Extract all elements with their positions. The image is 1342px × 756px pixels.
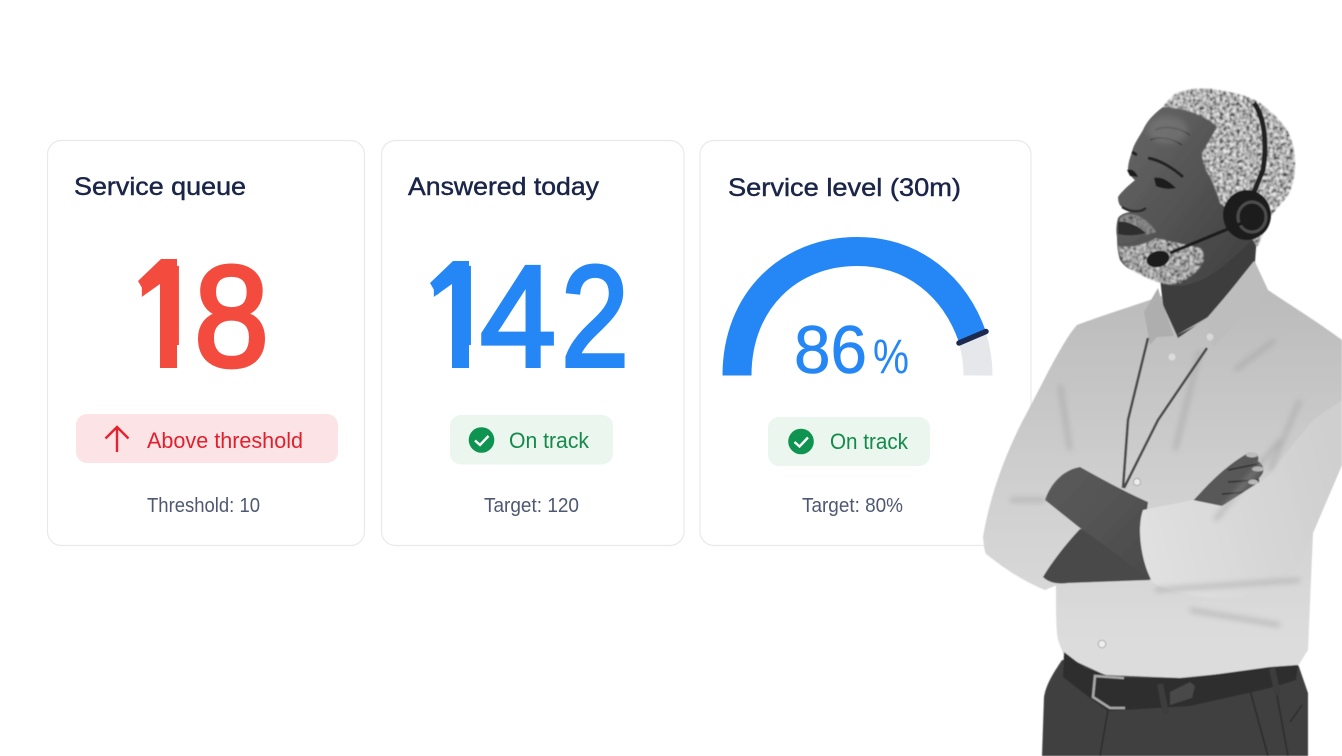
person: support agent with headset [983, 88, 1342, 756]
lower forearm [1043, 529, 1150, 583]
trousers [1042, 660, 1308, 756]
metric: 142 answered: 1 [421, 236, 501, 397]
panel: answered today [382, 140, 684, 546]
beard [1118, 214, 1204, 285]
collar [1144, 261, 1267, 360]
right sleeve cuff [1140, 400, 1342, 598]
status pill: above threshold [76, 414, 338, 463]
threshold note: Threshold: 10 [147, 495, 260, 517]
icon: check circle [788, 429, 814, 454]
status pill: above threshold: Above threshold [147, 428, 303, 453]
gauge value [794, 312, 909, 388]
heading: service queue: Service queue [74, 173, 246, 201]
heading: answered today: Answered today [408, 173, 600, 201]
metric: 142 answered: 2 [561, 236, 629, 397]
metric: 142 answered [412, 236, 629, 397]
gauge value: % [873, 331, 909, 384]
shirt torso [1046, 262, 1342, 678]
panel: service level [700, 140, 1031, 546]
face [1116, 100, 1262, 286]
target note: Target: 80% [802, 495, 903, 517]
icon: check circle [469, 427, 494, 453]
shirt folds [1010, 340, 1300, 625]
hand [1192, 452, 1264, 506]
upper forearm [1045, 467, 1153, 581]
left sleeve [983, 325, 1085, 590]
lanyard [1123, 338, 1207, 488]
metric: 18 queued: 8 [194, 236, 269, 397]
status pill: on track [450, 415, 613, 464]
status pill: on track: On track [830, 429, 909, 454]
panel: service queue [48, 140, 364, 546]
headset [1145, 103, 1271, 270]
target note: Target: 120 [484, 495, 579, 517]
status pill: on track: On track [509, 428, 590, 453]
facial features [1122, 116, 1190, 211]
icon: up arrow [106, 427, 128, 452]
hair [1163, 88, 1295, 247]
metric: 142 answered: 4 [480, 236, 556, 397]
lips [1118, 222, 1146, 244]
neck [1160, 235, 1257, 338]
gauge value: 86 [794, 312, 867, 388]
metric: 18 queued: 1 [129, 236, 209, 397]
gauge: 86 percent [737, 252, 986, 388]
belt [1063, 652, 1298, 714]
forehead highlight [1148, 116, 1188, 144]
shirt buttons [1098, 478, 1140, 648]
status pill: on track [768, 417, 930, 466]
metric: 18 queued [120, 236, 269, 397]
heading: service level: Service level (30m) [728, 174, 961, 202]
